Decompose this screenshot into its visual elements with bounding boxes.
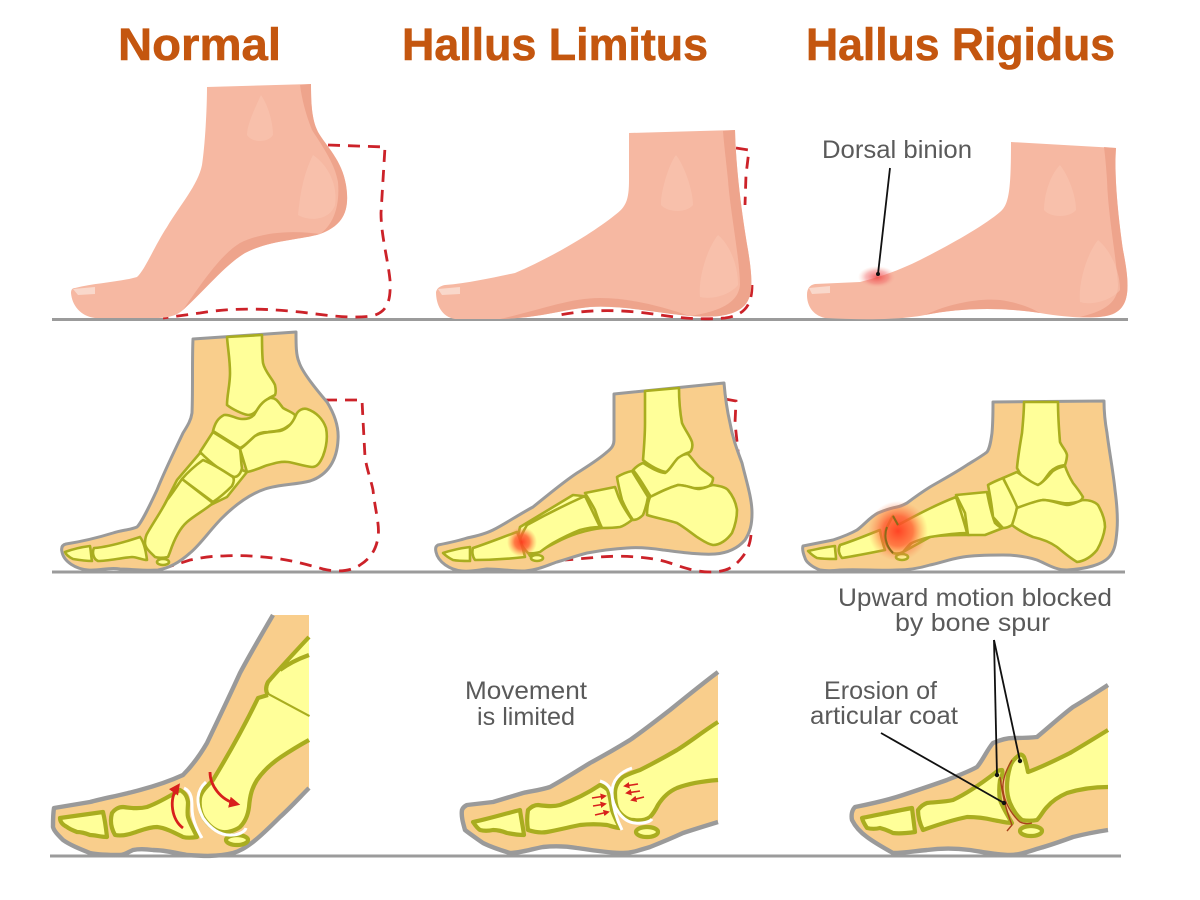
talus	[633, 454, 713, 497]
cartilage	[600, 768, 652, 830]
proximal phalanx	[93, 537, 147, 561]
column headings	[118, 19, 1115, 70]
skin outline	[53, 615, 309, 856]
navicular	[200, 432, 242, 477]
calcaneus	[240, 409, 327, 472]
callout: movement is limited: is limited	[477, 703, 575, 731]
skeleton: normal	[62, 332, 378, 571]
skin outline	[852, 685, 1108, 855]
distal phalanx	[862, 808, 915, 833]
metatarsal	[615, 722, 718, 820]
distal phalanx	[473, 810, 524, 835]
heading: Hallus Limitus: Hallus Limitus	[402, 19, 708, 70]
proximal phalanx	[472, 532, 525, 560]
callout: erosion of articular coat: Erosion of	[824, 677, 937, 705]
tissue outline	[62, 332, 338, 570]
dashed flat foot silhouette	[163, 145, 390, 318]
metatarsal	[200, 695, 309, 832]
tissue outline	[436, 383, 752, 571]
sesamoid	[157, 559, 169, 565]
sesamoid	[636, 827, 658, 837]
metatarsal with spur	[885, 497, 967, 554]
cuneiform	[585, 487, 632, 528]
callout: upward motion blocked by bone spur: Upward motion blocked	[838, 584, 1112, 612]
foot exterior: normal	[71, 84, 390, 318]
distal phalanx	[808, 546, 836, 559]
skin outline	[462, 672, 718, 853]
tibia	[227, 335, 276, 415]
heading: Normal: Normal	[118, 19, 281, 70]
cuneiform bones	[266, 637, 309, 717]
proximal phalanx	[527, 785, 620, 832]
red bump: dorsal bunion	[858, 266, 896, 288]
callout: movement is limited: Movement	[465, 677, 587, 705]
dashed flat foot silhouette	[555, 148, 752, 319]
distal phalanx	[60, 812, 107, 837]
metatarsal	[145, 479, 213, 558]
callout: upward motion blocked by bone spur: by bone spur	[895, 609, 1050, 637]
metatarsal with bone spur	[1007, 730, 1108, 821]
distal phalanx	[443, 547, 470, 561]
callout: dorsal binion	[822, 136, 972, 276]
talus	[213, 398, 295, 448]
metatarsal	[520, 496, 600, 553]
joint detail: hallus rigidus	[852, 685, 1108, 855]
dashed flat foot silhouette	[565, 399, 751, 572]
tissue outline	[803, 401, 1117, 571]
calcaneus	[647, 485, 737, 545]
talus	[1003, 466, 1083, 508]
proximal phalanx	[111, 790, 197, 838]
joint detail: hallus limitus	[462, 672, 718, 853]
calcaneus	[1012, 500, 1105, 562]
proximal phalanx	[839, 530, 885, 558]
foot exterior: hallus limitus	[436, 130, 752, 319]
callout: movement is limited	[465, 677, 587, 731]
distal phalanx	[65, 546, 92, 561]
sesamoid	[896, 554, 908, 560]
tibia	[643, 388, 692, 472]
inflammation glow	[868, 501, 928, 561]
eroded articular surface	[1000, 760, 1032, 831]
skeleton: hallus limitus	[436, 383, 752, 572]
navicular	[617, 471, 648, 520]
callout: erosion of articular coat	[810, 677, 1006, 805]
sesamoid	[531, 555, 543, 561]
inflammation glow	[507, 527, 537, 557]
sesamoid	[1020, 826, 1042, 836]
heading: Hallus Rigidus: Hallus Rigidus	[806, 19, 1115, 70]
cuneiform	[956, 492, 1003, 535]
sesamoid	[226, 835, 248, 845]
red arrow: toe motion	[172, 786, 183, 828]
cuneiform	[182, 460, 234, 502]
red arrows: limited movement	[592, 784, 644, 815]
cartilage	[184, 782, 246, 838]
navicular	[988, 478, 1017, 528]
callout: erosion of articular coat: articular coat	[810, 702, 958, 730]
joint detail: normal	[53, 615, 309, 856]
tibia	[1017, 402, 1067, 485]
callout: dorsal binion: Dorsal binion	[822, 136, 972, 164]
red arrow: metatarsal motion	[210, 772, 237, 804]
callout: upward motion blocked by bone spur	[838, 584, 1112, 777]
proximal phalanx with spur	[918, 770, 1012, 830]
foot exterior: hallus rigidus	[807, 142, 1128, 319]
skeleton: hallus rigidus	[803, 401, 1117, 571]
dashed flat foot silhouette	[168, 400, 378, 571]
ground lines	[50, 320, 1128, 856]
